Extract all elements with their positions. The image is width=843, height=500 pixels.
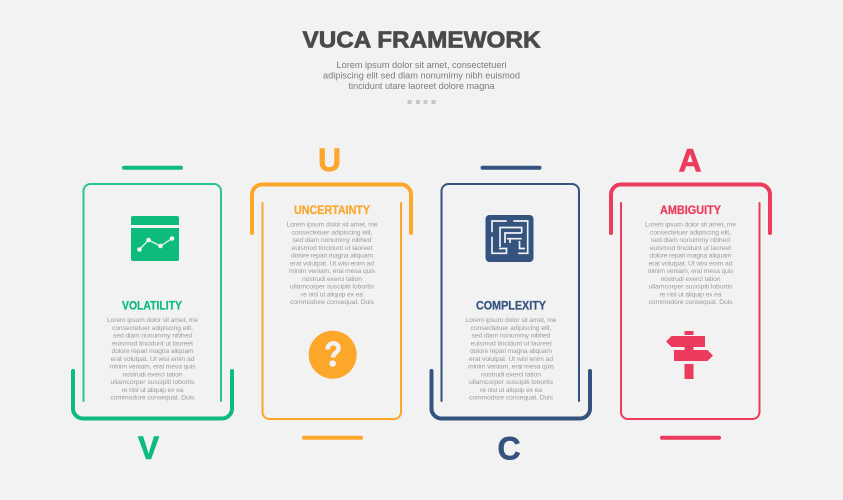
body text: dolore repari magna aliquam bbox=[291, 253, 373, 260]
body text: euismod tincidunt ut laoreet bbox=[292, 245, 373, 252]
accent bar bbox=[662, 436, 719, 440]
pagination dots bbox=[408, 100, 436, 104]
body text: re nisl ut aliquip ex ea bbox=[122, 387, 184, 394]
body text: euismod tincidunt ut laoreet bbox=[650, 245, 731, 252]
letter U: U bbox=[318, 142, 341, 178]
heading: VOLATILITY bbox=[122, 300, 182, 313]
icon: question mark bbox=[309, 331, 357, 379]
body text: commodore consequat. Duis bbox=[648, 299, 733, 306]
body text: Lorem ipsum dolor sit amet, me bbox=[466, 317, 557, 324]
body text: nostrudi exerci tation bbox=[481, 372, 541, 378]
body text: minim veniam, erai mesa quis bbox=[110, 364, 196, 371]
thick bracket bbox=[611, 184, 770, 233]
body text bbox=[466, 317, 557, 402]
letter V: V bbox=[138, 430, 160, 466]
thin frame bbox=[262, 203, 401, 419]
body text: sed diam nonummy nibhed bbox=[292, 237, 372, 244]
thick bracket bbox=[431, 371, 590, 419]
icon: maze bbox=[486, 215, 534, 262]
body text: dolore repari magna aliquam bbox=[470, 348, 552, 355]
body text: consectetuer adipiscing elit, bbox=[470, 325, 552, 332]
body text: euismod tincidunt ut laoreet bbox=[112, 340, 193, 348]
body text: re nisl ut aliquip ex ea bbox=[660, 292, 722, 298]
thin frame bbox=[84, 184, 221, 401]
body text bbox=[286, 222, 378, 306]
panel: volatility bbox=[73, 168, 232, 466]
body text: consectetuer adipiscing elit, bbox=[292, 230, 373, 236]
accent bar bbox=[304, 436, 361, 440]
body text bbox=[645, 222, 736, 306]
thick bracket bbox=[73, 371, 232, 419]
body text: minim veniam, erai mesa quis bbox=[648, 268, 734, 275]
body text: ullamcorper suscipiti lobortis bbox=[110, 379, 195, 386]
heading: UNCERTAINTY bbox=[294, 204, 370, 217]
accent bar bbox=[124, 166, 181, 170]
body text: Lorem ipsum dolor sit amet, me bbox=[286, 222, 378, 228]
body text: minim veniam, erai mesa quis bbox=[289, 268, 376, 275]
body text bbox=[107, 317, 198, 402]
panel: complexity bbox=[431, 168, 590, 466]
icon: signpost bbox=[666, 331, 713, 379]
body text: ullamcorper suscipiti lobortis bbox=[648, 284, 733, 291]
body text: re nisl ut aliquip ex ea bbox=[301, 292, 363, 298]
panel: uncertainty bbox=[252, 142, 411, 438]
thin frame bbox=[621, 203, 760, 419]
body text: dolore repari magna aliquam bbox=[650, 253, 732, 260]
body text: commodore consequat. Duis bbox=[469, 395, 554, 402]
body text: consectetuer adipiscing elit, bbox=[112, 325, 193, 332]
body text: ullamcorper suscipiti lobortis bbox=[290, 284, 375, 291]
thin frame bbox=[442, 184, 579, 401]
body text: commodore consequat. Duis bbox=[110, 395, 195, 402]
body text: re nisl ut aliquip ex ea bbox=[480, 387, 542, 394]
body text: commodore consequat. Duis bbox=[290, 299, 375, 306]
body text: sed diam nonummy nibhed bbox=[651, 237, 730, 244]
subtitle text block: tincidunt utare laoreet dolore magna bbox=[348, 81, 495, 91]
body text: erat volutpat. Ut wisi enim ad bbox=[469, 356, 553, 363]
body text: erat volutpat. Ut wisi enim ad bbox=[290, 260, 374, 268]
letter C: C bbox=[497, 430, 521, 466]
body text: erat volutpat. Ut wisi enim ad bbox=[648, 260, 733, 268]
body text: euismod tincidunt ut laoreet bbox=[470, 340, 552, 348]
body text: nostrudi exerci tation bbox=[660, 276, 721, 283]
body text: consectetuer adipiscing elit, bbox=[650, 230, 731, 236]
letter A: A bbox=[678, 142, 702, 178]
subtitle text block: adipiscing elit sed diam nonumimy nibh euismod bbox=[323, 70, 520, 80]
body text: erat volutpat. Ut wisi enim ad bbox=[110, 356, 195, 363]
body text: Lorem ipsum dolor sit amet, me bbox=[645, 222, 736, 228]
icon: line chart window bbox=[131, 216, 179, 261]
subtitle text block bbox=[323, 60, 520, 91]
body text: dolore repari magna aliquam bbox=[112, 348, 194, 355]
title: VUCA FRAMEWORK bbox=[302, 26, 541, 52]
heading: COMPLEXITY bbox=[476, 300, 546, 313]
thick bracket bbox=[252, 184, 411, 233]
body text: nostrudi exerci tation bbox=[302, 276, 362, 283]
accent bar bbox=[482, 166, 540, 170]
heading: AMBIGUITY bbox=[660, 204, 721, 217]
body text: sed diam nonummy nibhed bbox=[472, 333, 551, 340]
body text: sed diam nonummy nibhed bbox=[113, 333, 192, 340]
body text: nostrudi exerci tation bbox=[122, 372, 183, 378]
body text: minim veniam, erai mesa quis bbox=[468, 364, 555, 371]
subtitle text block: Lorem ipsum dolor sit amet, consectetueri bbox=[336, 60, 506, 70]
body text: Lorem ipsum dolor sit amet, me bbox=[107, 317, 198, 324]
body text: ullamcorper suscipiti lobortis bbox=[469, 379, 554, 386]
panel: ambiguity bbox=[611, 142, 770, 438]
